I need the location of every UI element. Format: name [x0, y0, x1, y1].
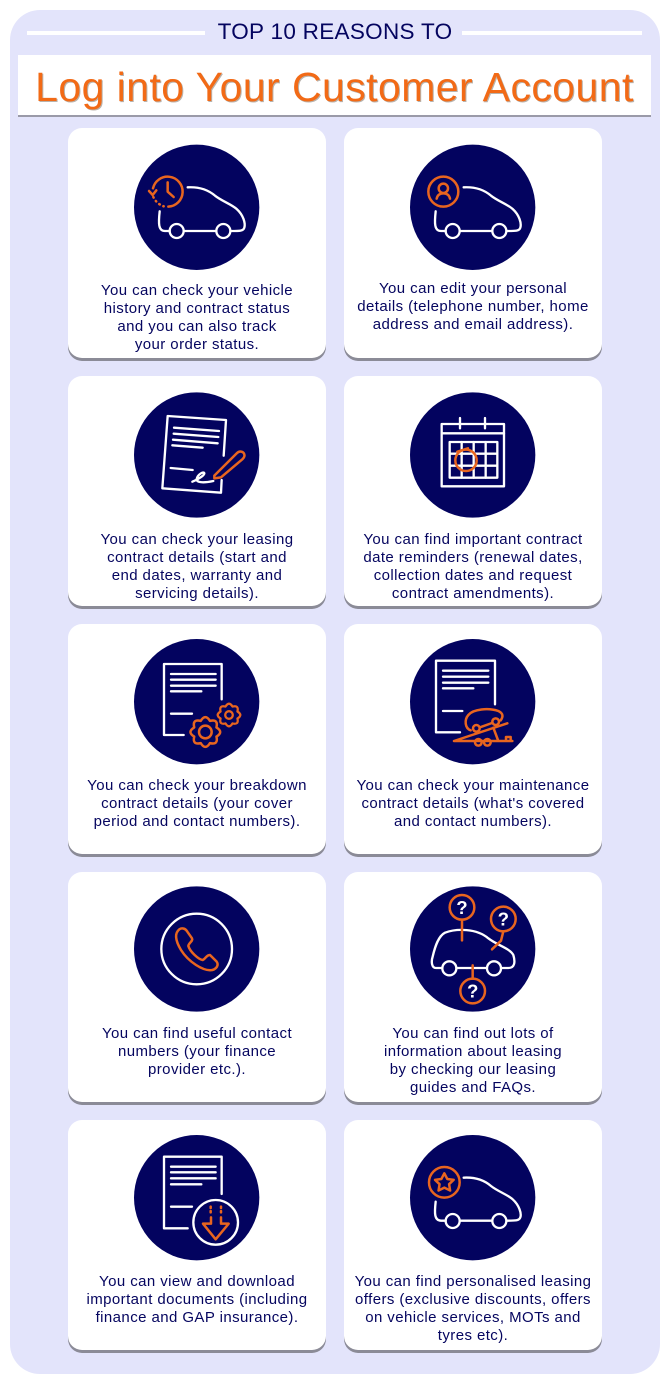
panel: contact numbers [68, 872, 326, 1102]
text: You can check your breakdown [87, 777, 307, 794]
title banner [18, 55, 651, 115]
icon: car with question marks: ? [498, 909, 509, 930]
text: You can check your leasing [100, 531, 294, 548]
panel: personalised offers [344, 1120, 602, 1350]
icon: signed contract with pen [134, 392, 260, 518]
text: finance and GAP insurance). [96, 1309, 298, 1326]
text [363, 531, 583, 602]
icon: car with question marks: ? [456, 897, 468, 918]
panel: breakdown contract [68, 624, 326, 854]
text: collection dates and request [374, 567, 572, 584]
text: You can edit your personal [379, 280, 567, 297]
icon: document with download arrow [134, 1135, 260, 1260]
text: contract amendments). [392, 585, 554, 602]
panel: documents [68, 1120, 326, 1350]
text: You can check your maintenance [356, 777, 590, 794]
text: numbers (your finance [118, 1043, 276, 1060]
panel: personal details [344, 128, 602, 358]
text: address and email address). [373, 316, 573, 333]
text: servicing details). [135, 585, 259, 602]
text: important documents (including [86, 1291, 308, 1308]
text: history and contract status [104, 300, 290, 317]
text: provider etc.). [148, 1061, 246, 1078]
text: You can find out lots of [392, 1025, 554, 1042]
icon: telephone [134, 886, 260, 1012]
panel: date reminders [344, 376, 602, 606]
text: on vehicle services, MOTs and [365, 1309, 581, 1326]
panel: leasing contract [68, 376, 326, 606]
text [86, 1273, 308, 1326]
text [356, 777, 590, 830]
text: contract details (start and [107, 549, 287, 566]
text [357, 280, 589, 333]
text: You can check your vehicle [101, 282, 293, 299]
text: information about leasing [384, 1043, 562, 1060]
text: tyres etc). [438, 1327, 508, 1344]
icon: car with person [410, 144, 536, 270]
text: details (telephone number, home [357, 298, 589, 315]
text: guides and FAQs. [410, 1079, 536, 1096]
text: You can find useful contact [102, 1025, 292, 1042]
text: You can find important contract [363, 531, 583, 548]
icon: calendar [410, 392, 536, 518]
title: Log into Your Customer Account [35, 64, 634, 110]
text: your order status. [135, 336, 259, 353]
text [100, 531, 294, 602]
text [102, 1025, 292, 1078]
text: date reminders (renewal dates, [363, 549, 583, 566]
icon: car with question marks: ? [467, 981, 478, 1002]
text [87, 777, 307, 830]
icon: car with question marks [410, 886, 536, 1012]
icon: car with clock [134, 144, 260, 270]
text: offers (exclusive discounts, offers [355, 1291, 591, 1308]
text: end dates, warranty and [112, 567, 282, 584]
text: and contact numbers). [394, 813, 552, 830]
heading: top 10 reasons to: TOP 10 REASONS TO [218, 19, 452, 44]
panel: maintenance contract [344, 624, 602, 854]
icon: document with gears [134, 639, 260, 764]
text: contract details (your cover [101, 795, 293, 812]
text: You can view and download [99, 1273, 295, 1290]
text: contract details (what's covered [361, 795, 585, 812]
text: period and contact numbers). [94, 813, 300, 830]
icon: document with car on trailer [410, 639, 536, 764]
panel: leasing guides [344, 872, 602, 1102]
text: You can find personalised leasing [355, 1273, 591, 1290]
icon: car with star [410, 1135, 536, 1260]
text: by checking our leasing [390, 1061, 556, 1078]
text [101, 282, 293, 353]
text [355, 1273, 591, 1344]
text: and you can also track [117, 318, 277, 335]
panel: vehicle history [68, 128, 326, 358]
text [384, 1025, 562, 1096]
